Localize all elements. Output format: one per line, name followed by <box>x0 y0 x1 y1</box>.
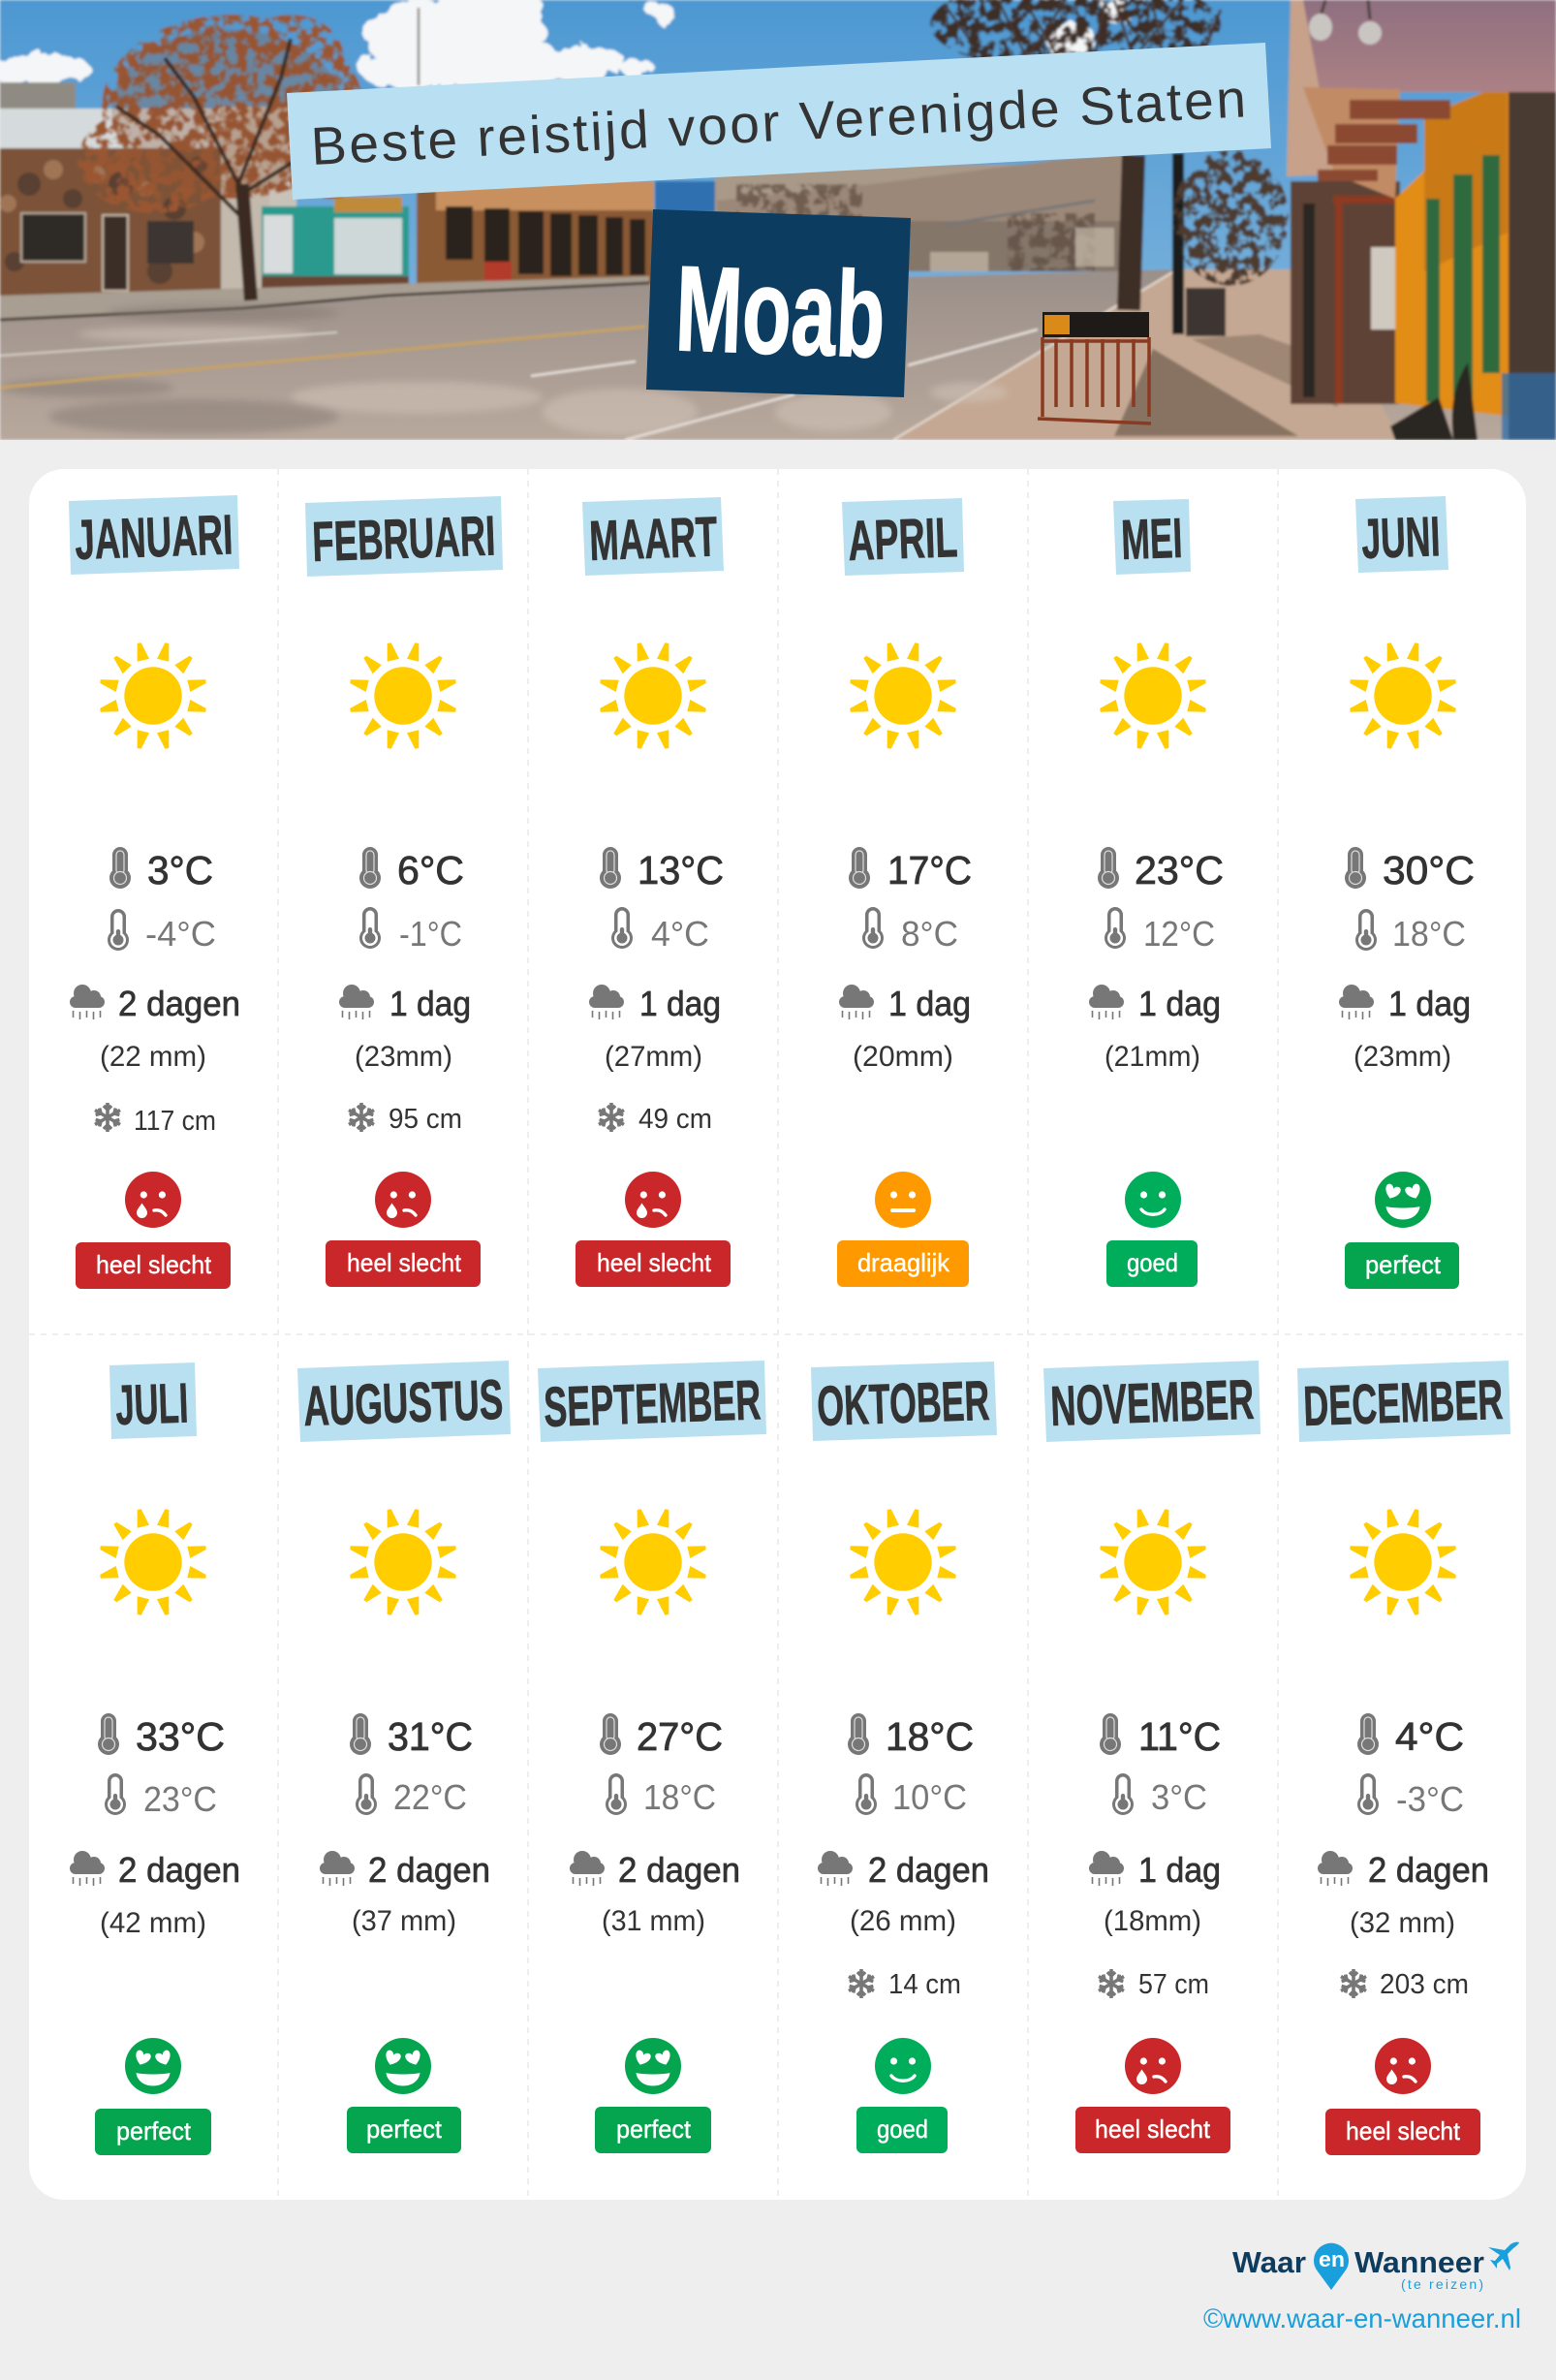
month heading: JANUARI <box>74 503 233 572</box>
icon: snowflake <box>847 1969 876 1998</box>
icon: sun <box>600 642 706 749</box>
min temperature: -4°C <box>145 914 216 954</box>
icon: rain cloud <box>839 985 874 1019</box>
icon: snowflake <box>1097 1969 1126 1998</box>
month heading <box>1355 496 1448 573</box>
icon: map pin: en <box>1319 2247 1345 2271</box>
month heading <box>69 495 239 575</box>
icon: rain cloud <box>70 985 105 1019</box>
rain days: 2 dagen <box>1368 1850 1489 1890</box>
icon: rain cloud <box>1318 1851 1353 1886</box>
rating badge: heel slecht <box>96 1250 212 1279</box>
icon: rating face <box>375 1172 431 1228</box>
rating badge: heel slecht <box>597 1248 712 1277</box>
icon: plane <box>1488 2242 1519 2270</box>
max temperature: 6°C <box>397 848 464 892</box>
rain days: 1 dag <box>1138 1850 1221 1890</box>
rainfall: (20mm) <box>853 1041 953 1073</box>
rain days: 1 dag <box>1138 984 1221 1023</box>
month heading <box>1113 499 1191 575</box>
icon: sun <box>1350 642 1456 749</box>
rating badge <box>1106 1240 1198 1287</box>
icon: thermometer high <box>98 1713 119 1755</box>
month heading: APRIL <box>847 506 958 573</box>
rating badge <box>1075 2107 1230 2153</box>
column and row dividers <box>29 469 1526 2200</box>
icon: rating face <box>625 1172 681 1228</box>
city label: Moab <box>646 209 911 397</box>
icon: rain cloud <box>818 1851 853 1886</box>
panel: september <box>538 1361 766 2153</box>
month heading <box>582 497 724 576</box>
rainfall: (22 mm) <box>100 1041 206 1073</box>
max temperature: 23°C <box>1135 848 1224 892</box>
month heading <box>538 1361 766 1442</box>
rain days: 2 dagen <box>118 1850 240 1890</box>
month heading: OKTOBER <box>816 1369 990 1438</box>
photo element: bike rack sign <box>1038 312 1151 423</box>
panel: december <box>1297 1361 1510 2155</box>
rating badge <box>595 2107 711 2153</box>
icon: sun <box>1100 1509 1206 1615</box>
snowfall: 49 cm <box>638 1104 712 1135</box>
icon: thermometer high <box>1345 847 1366 889</box>
icon: sun <box>1100 642 1206 749</box>
icon: thermometer high <box>1100 1713 1121 1755</box>
icon: rain cloud <box>70 1851 105 1886</box>
icon: rain cloud <box>1089 985 1124 1019</box>
month heading <box>305 496 503 577</box>
icon: rating face <box>125 2038 181 2094</box>
logo: Waar en Wanneer: Wanneer <box>1354 2245 1484 2279</box>
min temperature: 3°C <box>1151 1777 1207 1817</box>
icon: snowflake <box>347 1103 376 1132</box>
rating badge <box>95 2109 211 2155</box>
icon: thermometer low <box>105 1773 126 1815</box>
max temperature: 11°C <box>1138 1714 1221 1759</box>
icon: snowflake <box>93 1103 122 1132</box>
rating badge <box>326 1240 481 1287</box>
snowfall: 203 cm <box>1380 1969 1469 2000</box>
min temperature: 8°C <box>901 914 958 954</box>
panel: oktober <box>811 1362 997 2153</box>
min temperature: 10°C <box>892 1777 967 1817</box>
month heading <box>1043 1361 1260 1442</box>
rain days: 1 dag <box>639 984 721 1023</box>
icon: thermometer high <box>600 847 621 889</box>
icon: sun <box>100 1509 206 1615</box>
rating badge <box>347 2107 461 2153</box>
max temperature: 4°C <box>1395 1714 1464 1759</box>
icon: rating face <box>1375 1172 1431 1228</box>
logo: Waar en Wanneer: (te reizen) <box>1401 2276 1483 2292</box>
header photo: Moab main street <box>0 0 1556 440</box>
rating badge <box>576 1240 731 1287</box>
panel: mei <box>1089 499 1224 1287</box>
month heading <box>811 1362 997 1441</box>
icon: thermometer high <box>350 1713 371 1755</box>
rainfall: (21mm) <box>1105 1041 1200 1073</box>
min temperature: -3°C <box>1396 1779 1464 1819</box>
rain days: 2 dagen <box>618 1850 740 1890</box>
icon: thermometer low <box>1105 907 1126 949</box>
icon: rating face <box>1125 2038 1181 2094</box>
icon: sun <box>100 642 206 749</box>
icon: thermometer low <box>356 1773 377 1815</box>
icon: rain cloud <box>339 985 374 1019</box>
rainfall: (23mm) <box>1354 1041 1451 1073</box>
min temperature: 23°C <box>143 1779 217 1819</box>
icon: rating face <box>1125 1172 1181 1228</box>
min temperature: 12°C <box>1143 914 1215 954</box>
min temperature: 18°C <box>1392 914 1466 954</box>
panel: augustus <box>297 1361 511 2153</box>
icon: rain cloud <box>1089 1851 1124 1886</box>
icon: rain cloud <box>589 985 624 1019</box>
icon: thermometer low <box>359 907 381 949</box>
rain days: 1 dag <box>888 984 971 1023</box>
min temperature: 4°C <box>651 914 709 954</box>
icon: rating face <box>875 2038 931 2094</box>
logo: Waar en Wanneer <box>1232 2242 1519 2292</box>
month heading <box>842 498 964 576</box>
rainfall: (23mm) <box>355 1041 452 1073</box>
website credit: ©www.waar-en-wanneer.nl <box>1203 2303 1521 2333</box>
rainfall: (26 mm) <box>850 1905 956 1937</box>
month heading: SEPTEMBER <box>543 1368 762 1439</box>
rain days: 2 dagen <box>868 1850 989 1890</box>
icon: rain cloud <box>1339 985 1374 1019</box>
month heading <box>297 1361 511 1442</box>
icon: thermometer high <box>109 847 131 889</box>
rainfall: (32 mm) <box>1350 1907 1455 1939</box>
icon: snowflake <box>597 1103 626 1132</box>
icon: thermometer high <box>848 1713 869 1755</box>
rain days: 2 dagen <box>368 1850 490 1890</box>
icon: snowflake <box>1339 1969 1368 1998</box>
icon: thermometer high <box>1357 1713 1379 1755</box>
month heading: MAART <box>588 505 718 573</box>
rating badge: heel slecht <box>1095 2114 1211 2144</box>
logo: Waar en Wanneer: Waar <box>1232 2245 1306 2279</box>
rainfall: (27mm) <box>605 1041 702 1073</box>
rating badge <box>837 1240 969 1287</box>
snowfall: 57 cm <box>1138 1969 1209 2000</box>
rating badge: goed <box>1127 1248 1178 1277</box>
title banner: Beste reistijd voor Verenigde Staten <box>309 68 1247 176</box>
rating badge <box>856 2107 948 2153</box>
city label: Moab: Moab <box>673 241 887 384</box>
max temperature: 13°C <box>638 848 724 892</box>
rating badge: perfect <box>366 2114 443 2144</box>
month heading <box>109 1362 197 1439</box>
panel: maart <box>576 497 731 1287</box>
min temperature: -1°C <box>399 914 462 954</box>
rainfall: (31 mm) <box>602 1905 705 1937</box>
month heading: JUNI <box>1360 505 1441 571</box>
max temperature: 27°C <box>637 1714 723 1759</box>
rainfall: (18mm) <box>1104 1905 1201 1937</box>
min temperature: 22°C <box>393 1777 467 1817</box>
rain days: 2 dagen <box>118 984 240 1023</box>
icon: thermometer low <box>606 1773 627 1815</box>
icon: rain cloud <box>570 1851 605 1886</box>
month heading: JULI <box>114 1371 189 1437</box>
icon: thermometer high <box>1098 847 1119 889</box>
icon: sun <box>1350 1509 1456 1615</box>
max temperature: 17°C <box>887 848 972 892</box>
icon: rating face <box>375 2038 431 2094</box>
icon: sun <box>850 1509 956 1615</box>
icon: sun <box>600 1509 706 1615</box>
rain days: 1 dag <box>389 984 471 1023</box>
max temperature: 33°C <box>136 1714 225 1759</box>
rating badge: heel slecht <box>347 1248 462 1277</box>
icon: thermometer high <box>849 847 870 889</box>
icon: sun <box>350 1509 456 1615</box>
icon: thermometer low <box>1355 909 1377 951</box>
icon: sun <box>850 642 956 749</box>
panel: juli <box>70 1362 240 2155</box>
month heading: FEBRUARI <box>311 504 496 574</box>
max temperature: 18°C <box>886 1714 974 1759</box>
icon: thermometer low <box>862 907 884 949</box>
rainfall: (42 mm) <box>100 1907 206 1939</box>
icon: thermometer high <box>600 1713 621 1755</box>
snowfall: 14 cm <box>888 1969 961 2000</box>
icon: sun <box>350 642 456 749</box>
panel: april <box>837 498 972 1287</box>
icon: rating face <box>125 1172 181 1228</box>
rating badge: perfect <box>616 2114 692 2144</box>
icon: thermometer low <box>611 907 633 949</box>
icon: rain cloud <box>320 1851 355 1886</box>
rating badge: goed <box>877 2114 928 2144</box>
min temperature: 18°C <box>643 1777 716 1817</box>
panel: februari <box>305 496 503 1287</box>
month heading: MEI <box>1120 507 1183 572</box>
max temperature: 31°C <box>388 1714 473 1759</box>
panel: november <box>1043 1361 1260 2153</box>
snowfall: 117 cm <box>134 1106 216 1137</box>
max temperature: 30°C <box>1383 848 1475 892</box>
icon: rating face <box>875 1172 931 1228</box>
rainfall: (37 mm) <box>352 1905 456 1937</box>
snowfall: 95 cm <box>389 1104 462 1135</box>
rating badge: perfect <box>1365 1250 1442 1279</box>
icon: rating face <box>625 2038 681 2094</box>
rating badge <box>76 1242 231 1289</box>
max temperature: 3°C <box>147 848 213 892</box>
icon: map pin <box>1314 2243 1349 2290</box>
rating badge: heel slecht <box>1346 2116 1461 2145</box>
rain days: 1 dag <box>1388 984 1471 1023</box>
rating badge <box>1325 2109 1480 2155</box>
rating badge: draaglijk <box>857 1248 950 1277</box>
icon: thermometer low <box>856 1773 877 1815</box>
rating badge: perfect <box>116 2116 192 2145</box>
icon: rating face <box>1375 2038 1431 2094</box>
panel: monthly climate card <box>29 469 1526 2200</box>
icon: thermometer low <box>1357 1773 1379 1815</box>
title banner <box>287 43 1271 200</box>
icon: thermometer high <box>359 847 381 889</box>
rating badge <box>1345 1242 1459 1289</box>
month heading: AUGUSTUS <box>302 1368 504 1438</box>
panel: juni <box>1339 496 1475 1289</box>
month heading: NOVEMBER <box>1049 1368 1255 1438</box>
panel: januari <box>69 495 240 1289</box>
icon: thermometer low <box>108 909 129 951</box>
icon: thermometer low <box>1112 1773 1134 1815</box>
